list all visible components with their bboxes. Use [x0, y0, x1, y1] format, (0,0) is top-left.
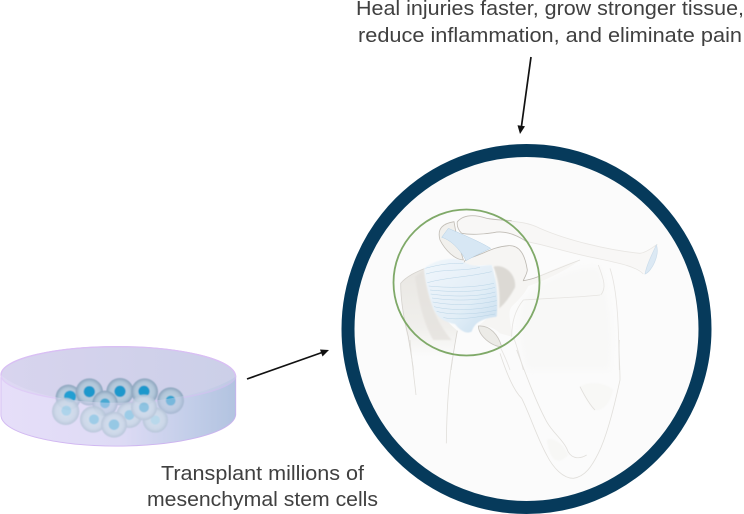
humerus groove shading	[415, 270, 452, 340]
petri dish with stem cells	[1, 347, 236, 446]
light outlines	[500, 265, 619, 370]
clavicle	[457, 216, 658, 274]
caption: transplant: Transplant millions of	[161, 463, 364, 485]
cuff fibres	[425, 263, 497, 319]
glenoid shadow	[493, 266, 515, 308]
caption: healing outcome: reduce inflammation, and eliminate pain	[358, 25, 742, 47]
rotator cuff	[424, 259, 497, 333]
caption: transplant	[147, 463, 378, 511]
cells back row	[56, 378, 184, 416]
dish rim surface	[1, 347, 236, 403]
clavicle outline	[457, 216, 657, 274]
shoulder circle	[348, 150, 705, 508]
humerus	[401, 268, 457, 357]
caption: healing outcome	[356, 0, 744, 47]
arrow: dish to shoulder	[247, 350, 329, 379]
front wall glass	[1, 375, 236, 446]
coracoid	[439, 222, 463, 260]
shoulder anatomy: scapula lower	[410, 340, 620, 478]
green highlight circle	[394, 210, 540, 356]
acromion and scapular neck	[464, 246, 580, 337]
clavicle end cap	[645, 245, 657, 274]
cells front row	[52, 394, 168, 438]
humerus outlines	[401, 268, 457, 370]
dish body	[1, 347, 236, 446]
lateral scapula edge	[478, 326, 502, 347]
coracoacromial ligament	[442, 228, 491, 261]
arrow: outcome to shoulder	[518, 57, 531, 134]
circle frame	[348, 150, 705, 508]
caption: transplant: mesenchymal stem cells	[147, 489, 378, 511]
acromion outline	[464, 246, 580, 281]
scapula body shading	[520, 267, 611, 370]
shoulder anatomy: upper	[401, 216, 658, 370]
